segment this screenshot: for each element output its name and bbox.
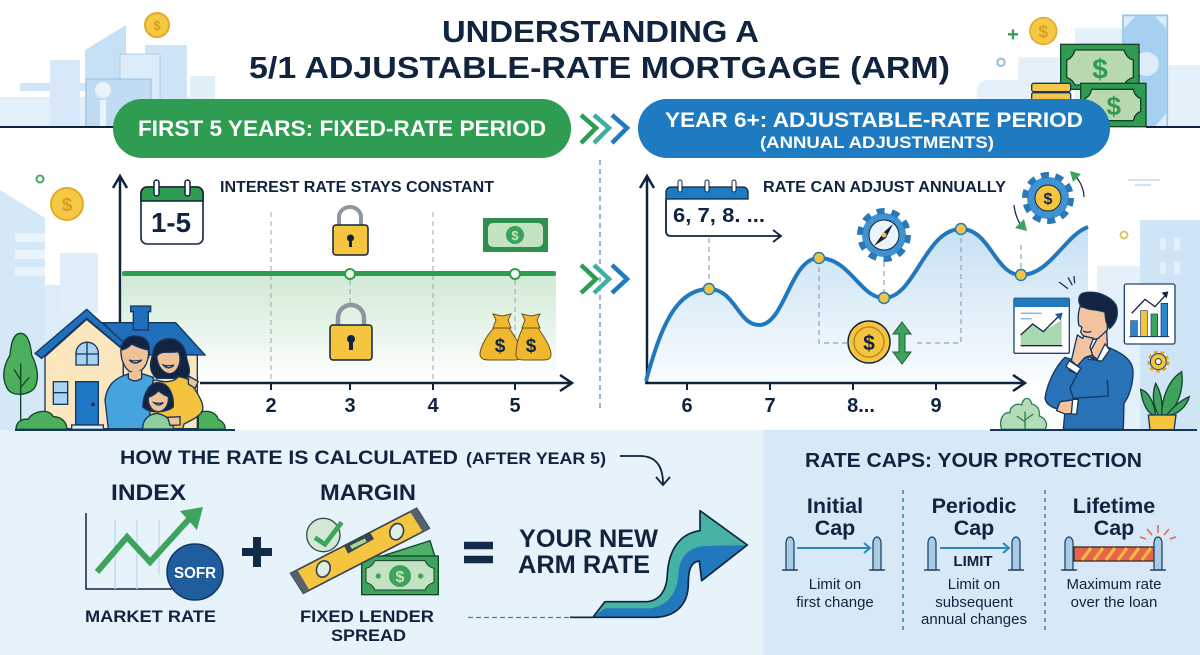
initial cap: Cap bbox=[815, 516, 855, 540]
icon: money bags: $ bbox=[495, 336, 506, 357]
banner: adjustable-rate period: (ANNUAL ADJUSTMENTS) bbox=[760, 134, 994, 152]
illustration: family bbox=[105, 336, 203, 429]
arrows: middle chevrons bbox=[581, 265, 627, 293]
icon: calendar 6, 7, 8 bbox=[666, 180, 781, 242]
background: left city skyline bbox=[0, 190, 98, 430]
axis labels: 7 bbox=[764, 395, 776, 417]
initial cap: Initial bbox=[807, 494, 863, 518]
woman bbox=[147, 339, 203, 429]
icon: banknote: $ bbox=[511, 228, 519, 243]
periodic cap: annual changes bbox=[921, 611, 1027, 628]
dashed lead-in bbox=[468, 616, 592, 618]
icon: coin with up-down arrow bbox=[848, 321, 911, 364]
heading: RATE CAPS: YOUR PROTECTION bbox=[805, 449, 1142, 472]
periodic cap: Limit on bbox=[948, 576, 1000, 593]
icon: top coin bbox=[145, 13, 169, 37]
title bbox=[249, 14, 950, 85]
result label bbox=[518, 525, 658, 579]
background: top-left city skyline bbox=[0, 25, 215, 127]
icon: top-right cash and coins: $ bbox=[1092, 53, 1108, 84]
lifetime cap: over the loan bbox=[1071, 594, 1157, 611]
icon: dollar gear with arrows bbox=[1014, 171, 1084, 231]
panel: how the rate is calculated bbox=[0, 429, 763, 655]
label: rate can adjust annually: RATE CAN ADJUST ANNUALLY bbox=[763, 179, 1006, 196]
icon: small lock bbox=[333, 207, 368, 255]
title: UNDERSTANDING A bbox=[442, 14, 759, 49]
man bbox=[105, 336, 153, 429]
initial cap: first change bbox=[796, 594, 874, 611]
illustration: thinking man bbox=[1045, 276, 1133, 429]
icon: calendar 6, 7, 8: 6, 7, 8. ... bbox=[673, 205, 765, 227]
icon: dollar gear with arrows: $ bbox=[1044, 191, 1053, 208]
icons: coin and circle near skyline: $ bbox=[62, 195, 73, 216]
index column bbox=[85, 480, 223, 626]
illustration: small gear bbox=[1149, 352, 1168, 371]
equals sign bbox=[464, 546, 493, 560]
axis labels: 9 bbox=[930, 395, 942, 417]
periodic cap: LIMIT bbox=[953, 553, 993, 570]
icon: compass gear bbox=[860, 211, 908, 259]
icon: top-right cash and coins bbox=[977, 15, 1200, 127]
axis labels: 3 bbox=[344, 395, 356, 417]
periodic cap bbox=[921, 494, 1027, 628]
margin column: FIXED LENDER bbox=[300, 607, 434, 626]
index column: MARKET RATE bbox=[85, 607, 216, 626]
illustration: bushes by the house bbox=[16, 411, 225, 429]
label: interest rate stays constant: INTEREST RATE STAYS CONSTANT bbox=[220, 179, 494, 196]
child bbox=[143, 383, 180, 429]
dividers bbox=[903, 490, 1045, 632]
axis labels: 4 bbox=[427, 395, 439, 417]
index column: SOFR bbox=[174, 565, 216, 582]
margin column bbox=[291, 480, 438, 645]
index column: INDEX bbox=[111, 480, 186, 505]
divider line behind the pills bbox=[0, 126, 1200, 128]
plus sign bbox=[242, 537, 272, 567]
panel: rate caps bbox=[763, 429, 1200, 655]
illustration: potted plant bbox=[1141, 372, 1189, 430]
periodic cap: Periodic bbox=[932, 494, 1016, 518]
icon: money bags: $ bbox=[526, 336, 537, 357]
icon: calendar 1-5: 1-5 bbox=[151, 207, 191, 238]
icon: banknote bbox=[483, 218, 548, 252]
axis labels bbox=[265, 395, 521, 417]
illustration: bar chart card bbox=[1124, 284, 1175, 344]
initial cap bbox=[782, 494, 885, 611]
margin column: MARGIN bbox=[320, 480, 416, 505]
axis labels bbox=[681, 395, 942, 417]
icon: level, cash and check: $ bbox=[396, 569, 405, 586]
icon: large lock bbox=[330, 305, 372, 360]
chart: fixed-rate period bbox=[113, 176, 572, 417]
chart: adjustable-rate curve bbox=[640, 176, 1088, 417]
icon: top coin: $ bbox=[153, 18, 161, 33]
banner: adjustable-rate period: YEAR 6+: ADJUSTABLE-RATE PERIOD bbox=[665, 109, 1083, 132]
result label: YOUR NEW bbox=[519, 525, 658, 553]
icon: calendar 1-5 bbox=[141, 180, 203, 244]
axis labels: 5 bbox=[509, 395, 521, 417]
lifetime cap: Lifetime bbox=[1073, 494, 1155, 518]
illustration: house bbox=[35, 306, 205, 429]
banner: fixed-rate period: FIRST 5 YEARS: FIXED-RATE PERIOD bbox=[138, 116, 546, 141]
icons: coin and circle near skyline bbox=[36, 176, 83, 220]
icon: top-right cash and coins: $ bbox=[1106, 91, 1121, 121]
lifetime cap bbox=[1061, 494, 1176, 611]
margin column: SPREAD bbox=[331, 626, 406, 645]
background: right city skyline bbox=[1097, 179, 1200, 430]
banner: adjustable-rate period bbox=[638, 99, 1110, 158]
centre dashed divider bbox=[599, 160, 601, 411]
lifetime cap: Maximum rate bbox=[1066, 576, 1162, 593]
icon: top-right cash and coins: $ bbox=[1039, 21, 1049, 41]
illustration: dashboard card bbox=[1014, 298, 1069, 353]
heading bbox=[120, 447, 606, 469]
arrow: heading to result bbox=[620, 456, 670, 485]
lifetime cap: Cap bbox=[1094, 516, 1134, 540]
initial cap: Limit on bbox=[809, 576, 861, 593]
axis labels: 6 bbox=[681, 395, 693, 417]
arrow: big rising arrow bbox=[570, 511, 747, 617]
icon: money bags bbox=[480, 314, 551, 360]
heading: HOW THE RATE IS CALCULATED bbox=[120, 447, 458, 469]
periodic cap: Cap bbox=[954, 516, 994, 540]
illustration: bush bbox=[1001, 398, 1047, 429]
heading: (AFTER YEAR 5) bbox=[466, 449, 606, 468]
periodic cap: subsequent bbox=[935, 594, 1014, 611]
arrows: top chevrons bbox=[581, 115, 627, 143]
icon: coin with up-down arrow: $ bbox=[863, 332, 875, 355]
axis labels: 8... bbox=[847, 395, 875, 417]
icon: level, cash and check bbox=[291, 508, 438, 595]
axis labels: 2 bbox=[265, 395, 277, 417]
title: 5/1 ADJUSTABLE-RATE MORTGAGE (ARM) bbox=[249, 50, 950, 85]
result label: ARM RATE bbox=[518, 551, 650, 579]
illustration: tree bbox=[4, 333, 37, 421]
banner: fixed-rate period bbox=[113, 99, 571, 158]
